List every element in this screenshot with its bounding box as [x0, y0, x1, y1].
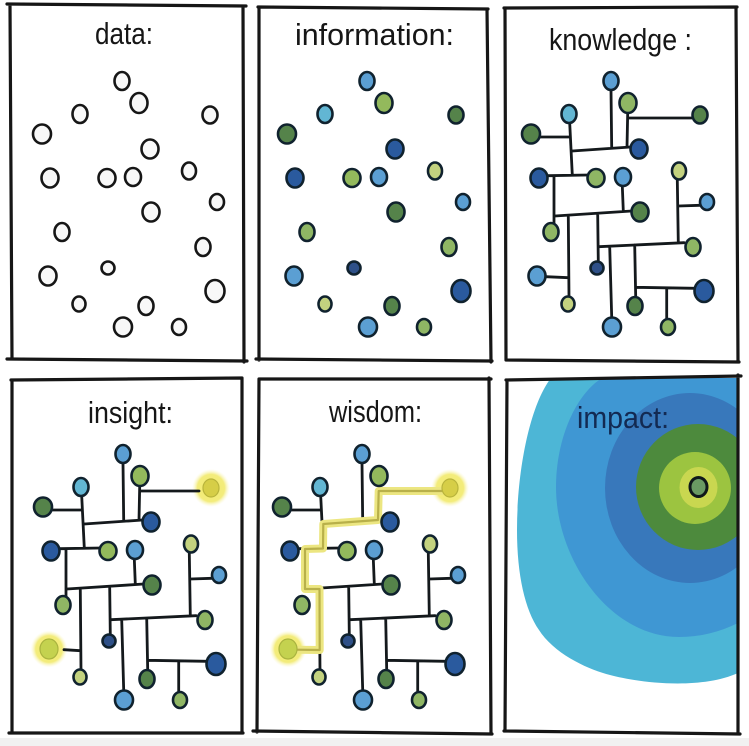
- highlighted path: glow: [296, 491, 443, 650]
- panel: impact: [504, 375, 749, 734]
- glow: upper right point: [192, 469, 230, 507]
- ring: dark green: [636, 424, 749, 550]
- heading: insight: insight:: [88, 395, 173, 430]
- ring: deep blue: [605, 393, 749, 583]
- connected points: [273, 445, 465, 710]
- connected points: [34, 445, 226, 710]
- central point: [690, 478, 707, 496]
- panel frame: data: [7, 4, 247, 362]
- glow: lower left point: [30, 630, 68, 668]
- panel: wisdom: [253, 378, 492, 734]
- impact ripple rings: [517, 378, 736, 684]
- coloured information points: [278, 72, 470, 336]
- highlighted path: core line: [296, 491, 443, 650]
- network with two highlighted points: [30, 445, 230, 710]
- ring: mid blue: [556, 378, 738, 637]
- panel: data: [7, 4, 247, 362]
- panel: knowledge: [504, 7, 739, 362]
- connecting lines: [292, 463, 451, 693]
- panel frame: wisdom: [253, 378, 492, 734]
- network of connected points: [522, 72, 714, 336]
- connected points: [522, 72, 714, 336]
- network with highlighted path between two points: [270, 445, 469, 710]
- glow: upper right point: [431, 469, 469, 507]
- panel frame: insight: [9, 378, 243, 733]
- ring: outer cyan: [517, 378, 738, 683]
- panel frame: knowledge: [504, 7, 739, 362]
- heading: wisdom: wisdom:: [328, 394, 422, 429]
- heading: information: information:: [295, 17, 454, 52]
- ring: lime green: [659, 452, 731, 524]
- panel frame: information: [256, 7, 492, 362]
- heading: knowledge: knowledge :: [549, 22, 692, 57]
- scattered empty data points: [33, 72, 224, 336]
- panel: information: [256, 7, 492, 362]
- panel frame: impact: [504, 375, 741, 734]
- glow: lower left point: [270, 630, 306, 668]
- ring: pale lime: [680, 467, 718, 508]
- heading: impact: impact:: [577, 400, 669, 435]
- heading: data: data:: [95, 16, 153, 51]
- connecting lines: [541, 90, 700, 320]
- connecting lines: [53, 463, 212, 693]
- panel: insight: [9, 378, 243, 733]
